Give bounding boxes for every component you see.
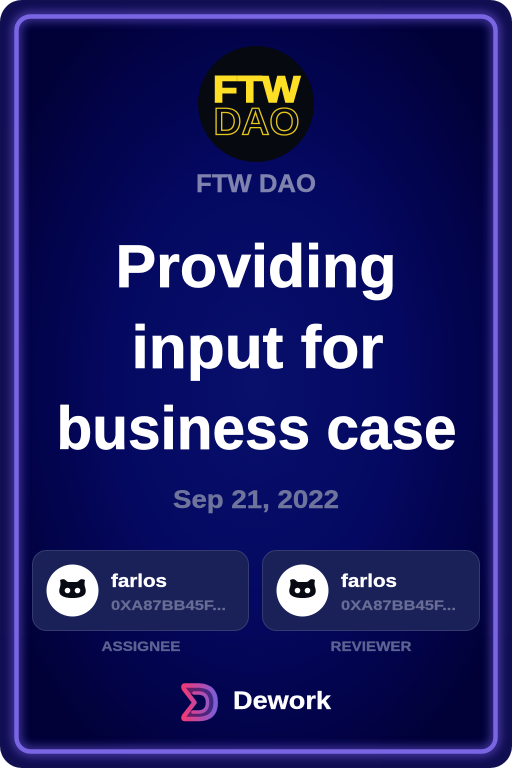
logo: FTW DAO (198, 46, 314, 162)
title: input for (132, 314, 384, 381)
title (56, 233, 456, 462)
assignee name: farlos (111, 571, 167, 591)
title: Providing (116, 233, 396, 300)
panel: reviewer (262, 550, 480, 630)
icon: Dework logo (183, 686, 216, 719)
panel: assignee (32, 550, 248, 630)
icon: reviewer avatar (276, 564, 328, 616)
brand name: Dework (233, 687, 331, 715)
assignee address: 0XA87BB45F... (111, 597, 226, 613)
logo: FTW DAO: DAO (214, 102, 300, 144)
reviewer address: 0XA87BB45F... (341, 597, 456, 613)
organisation name: FTW DAO (196, 170, 316, 198)
icon: assignee avatar (46, 564, 98, 616)
reviewer label: REVIEWER (330, 638, 412, 654)
assignee label: ASSIGNEE (102, 638, 180, 654)
logo: FTW DAO: FTW (213, 69, 300, 110)
reviewer name: farlos (341, 571, 397, 591)
date: Sep 21, 2022 (173, 486, 339, 514)
title: business case (56, 395, 456, 462)
